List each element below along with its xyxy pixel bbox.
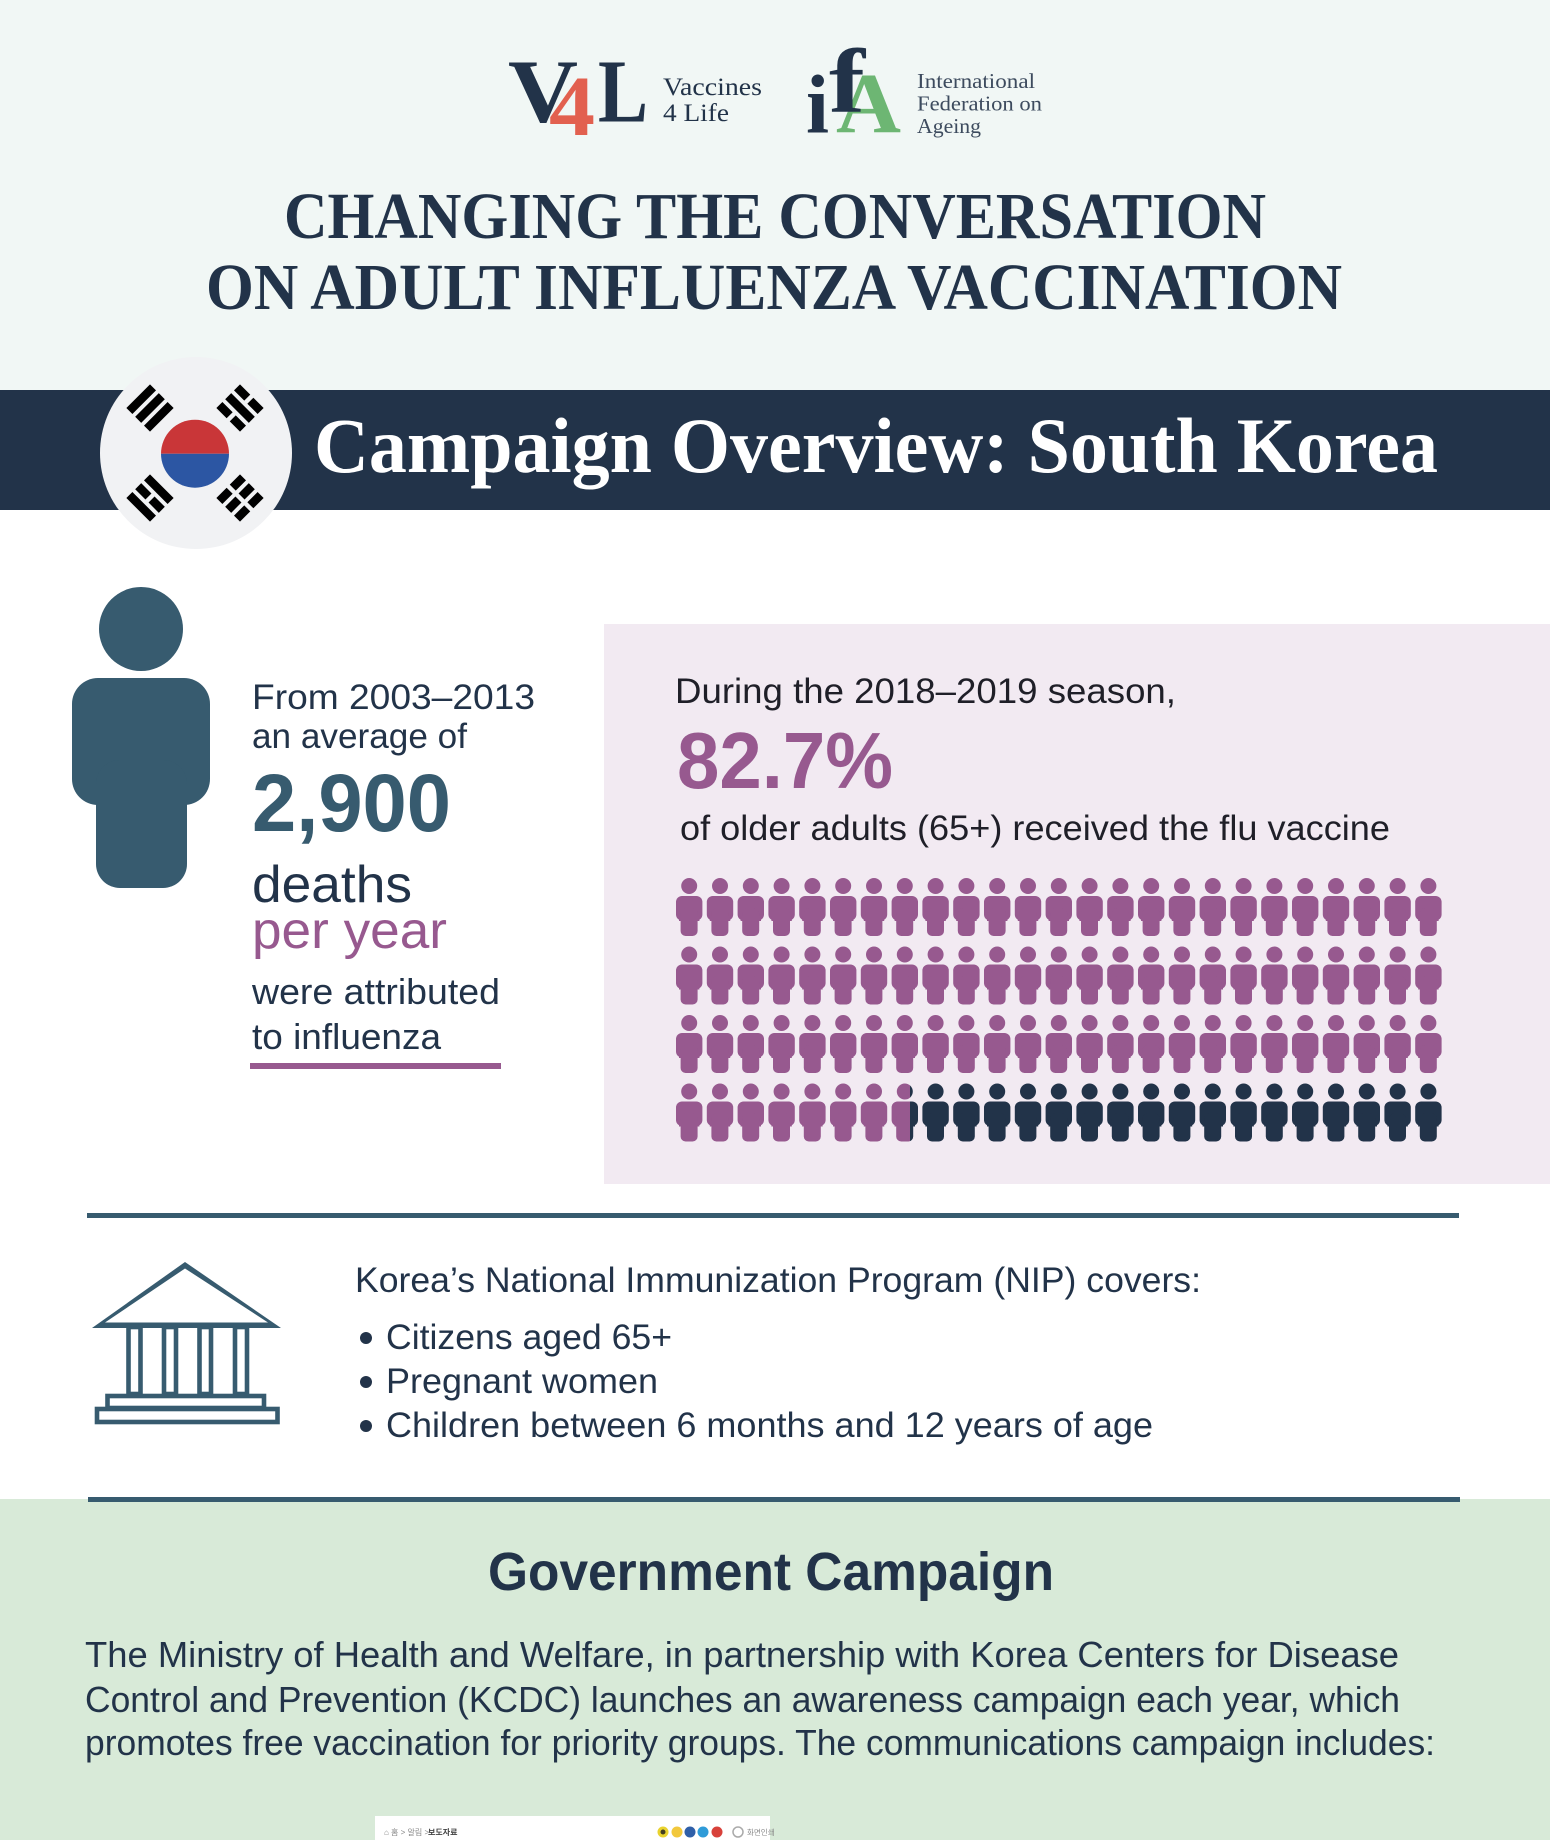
campaign website screenshot: ⌂ 홈 > 알림 > (384, 1827, 429, 1837)
logo: Vaccines 4 Life (508, 43, 762, 154)
coverage text: During the 2018–2019 season, (675, 672, 1176, 711)
logo: International Federation on Ageing: f (829, 31, 867, 132)
coverage text (675, 672, 1390, 848)
title: CHANGING THE CONVERSATION (284, 180, 1266, 253)
logo: Vaccines 4 Life: 4 (549, 58, 595, 154)
NIP coverage text: Citizens aged 65+ (386, 1318, 672, 1357)
icon: government building (92, 1262, 281, 1422)
NIP coverage text: Korea’s National Immunization Program (NIP) covers: (355, 1261, 1201, 1300)
logo: Vaccines 4 Life: L (598, 43, 648, 142)
logo: Vaccines 4 Life: 4 Life (663, 100, 729, 127)
logo: International Federation on Ageing: Ageing (917, 114, 982, 138)
icon: South Korean flag (100, 357, 292, 549)
deaths statistic text (250, 678, 535, 1069)
deaths statistic text: From 2003–2013 (252, 678, 535, 717)
banner: campaign overview (0, 390, 1550, 510)
logo: International Federation on Ageing: Federation on (917, 92, 1043, 116)
campaign website screenshot: 화면인쇄 (747, 1827, 775, 1837)
deaths statistic text: 2,900 (252, 758, 451, 849)
deaths statistic text: an average of (252, 717, 467, 756)
campaign description: promotes free vaccination for priority groups. The communications campaign includes: (85, 1722, 1435, 1763)
header background (0, 0, 1550, 390)
campaign description (85, 1634, 1435, 1763)
campaign website screenshot: 보도자료 (428, 1828, 458, 1837)
title: ON ADULT INFLUENZA VACCINATION (206, 251, 1342, 324)
logo: International Federation on Ageing: International (917, 69, 1035, 93)
deaths statistic text: to influenza (252, 1016, 442, 1057)
NIP coverage text: Children between 6 months and 12 years of age (386, 1406, 1153, 1445)
icon: large person (72, 587, 210, 888)
logo: International Federation on Ageing: A (836, 55, 901, 151)
deaths statistic text: per year (252, 902, 447, 960)
campaign description: Control and Prevention (KCDC) launches an awareness campaign each year, which (85, 1679, 1400, 1720)
deaths statistic text: deaths (252, 856, 412, 914)
campaign website screenshot (375, 1816, 775, 1840)
panel: government campaign (0, 1497, 1550, 1840)
coverage text: 82.7% (677, 716, 893, 805)
campaign description: The Ministry of Health and Welfare, in partnership with Korea Centers for Disease (85, 1634, 1399, 1675)
logo: International Federation on Ageing (806, 31, 1043, 151)
title (206, 180, 1342, 324)
pictogram: 100 people, 82.7 vaccinated (676, 878, 1442, 1142)
NIP coverage text: Pregnant women (386, 1362, 658, 1401)
logo: International Federation on Ageing: i (806, 58, 829, 151)
coverage text: of older adults (65+) received the flu vaccine (680, 809, 1390, 848)
deaths statistic text: were attributed (251, 971, 500, 1012)
banner: campaign overview: Campaign Overview: South Korea (314, 402, 1438, 489)
logo: Vaccines 4 Life: V (508, 43, 578, 142)
panel: vaccination coverage (604, 624, 1550, 1184)
logo: Vaccines 4 Life: Vaccines (663, 74, 762, 101)
NIP coverage text (355, 1261, 1201, 1445)
heading: Government Campaign (488, 1542, 1054, 1602)
